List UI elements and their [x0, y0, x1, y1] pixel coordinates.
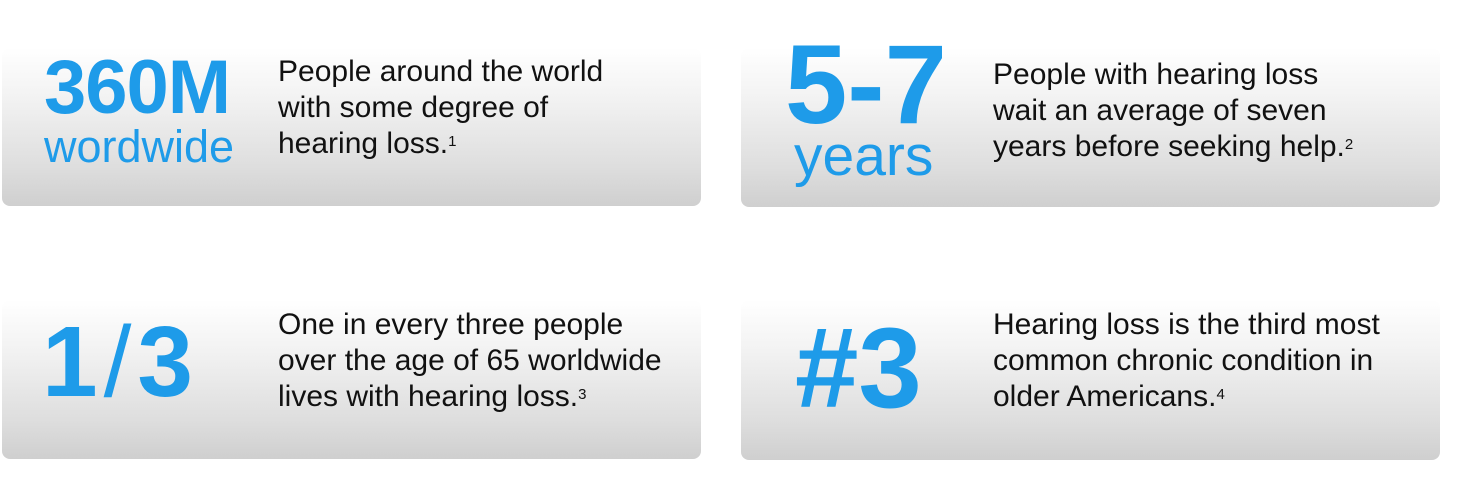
text: description: One in every three people	[278, 308, 623, 341]
text: description: People with hearing loss	[993, 58, 1318, 91]
text: description: Hearing loss is the third most	[993, 308, 1380, 341]
stat: #3: #3	[795, 305, 922, 432]
panel: #3	[741, 300, 1440, 460]
text: description: lives with hearing loss.3	[278, 380, 586, 413]
text: description	[993, 58, 1353, 163]
text: description	[993, 308, 1380, 413]
text: description: hearing loss.1	[278, 127, 456, 160]
stat label: years: years	[794, 124, 933, 188]
panel: 1/3	[2, 300, 701, 459]
stat: 360M: 360M	[44, 45, 230, 130]
panel: 5-7 years	[741, 48, 1440, 207]
stat: 1/3: 1/3	[42, 306, 199, 418]
panel: 360M	[2, 48, 701, 206]
text: description: wait an average of seven	[993, 94, 1327, 127]
stat: 5-7: 5-7	[785, 22, 947, 147]
text: description: common chronic condition in	[993, 344, 1373, 377]
text: description: People around the world	[278, 55, 603, 88]
text: description: with some degree of	[278, 91, 548, 124]
text: description: over the age of 65 worldwide	[278, 344, 662, 377]
text: description	[278, 55, 603, 160]
stat label: wordwide: wordwide	[44, 121, 234, 172]
text: description: years before seeking help.2	[993, 130, 1353, 163]
text: description: older Americans.4	[993, 380, 1225, 413]
text: description	[278, 308, 662, 413]
